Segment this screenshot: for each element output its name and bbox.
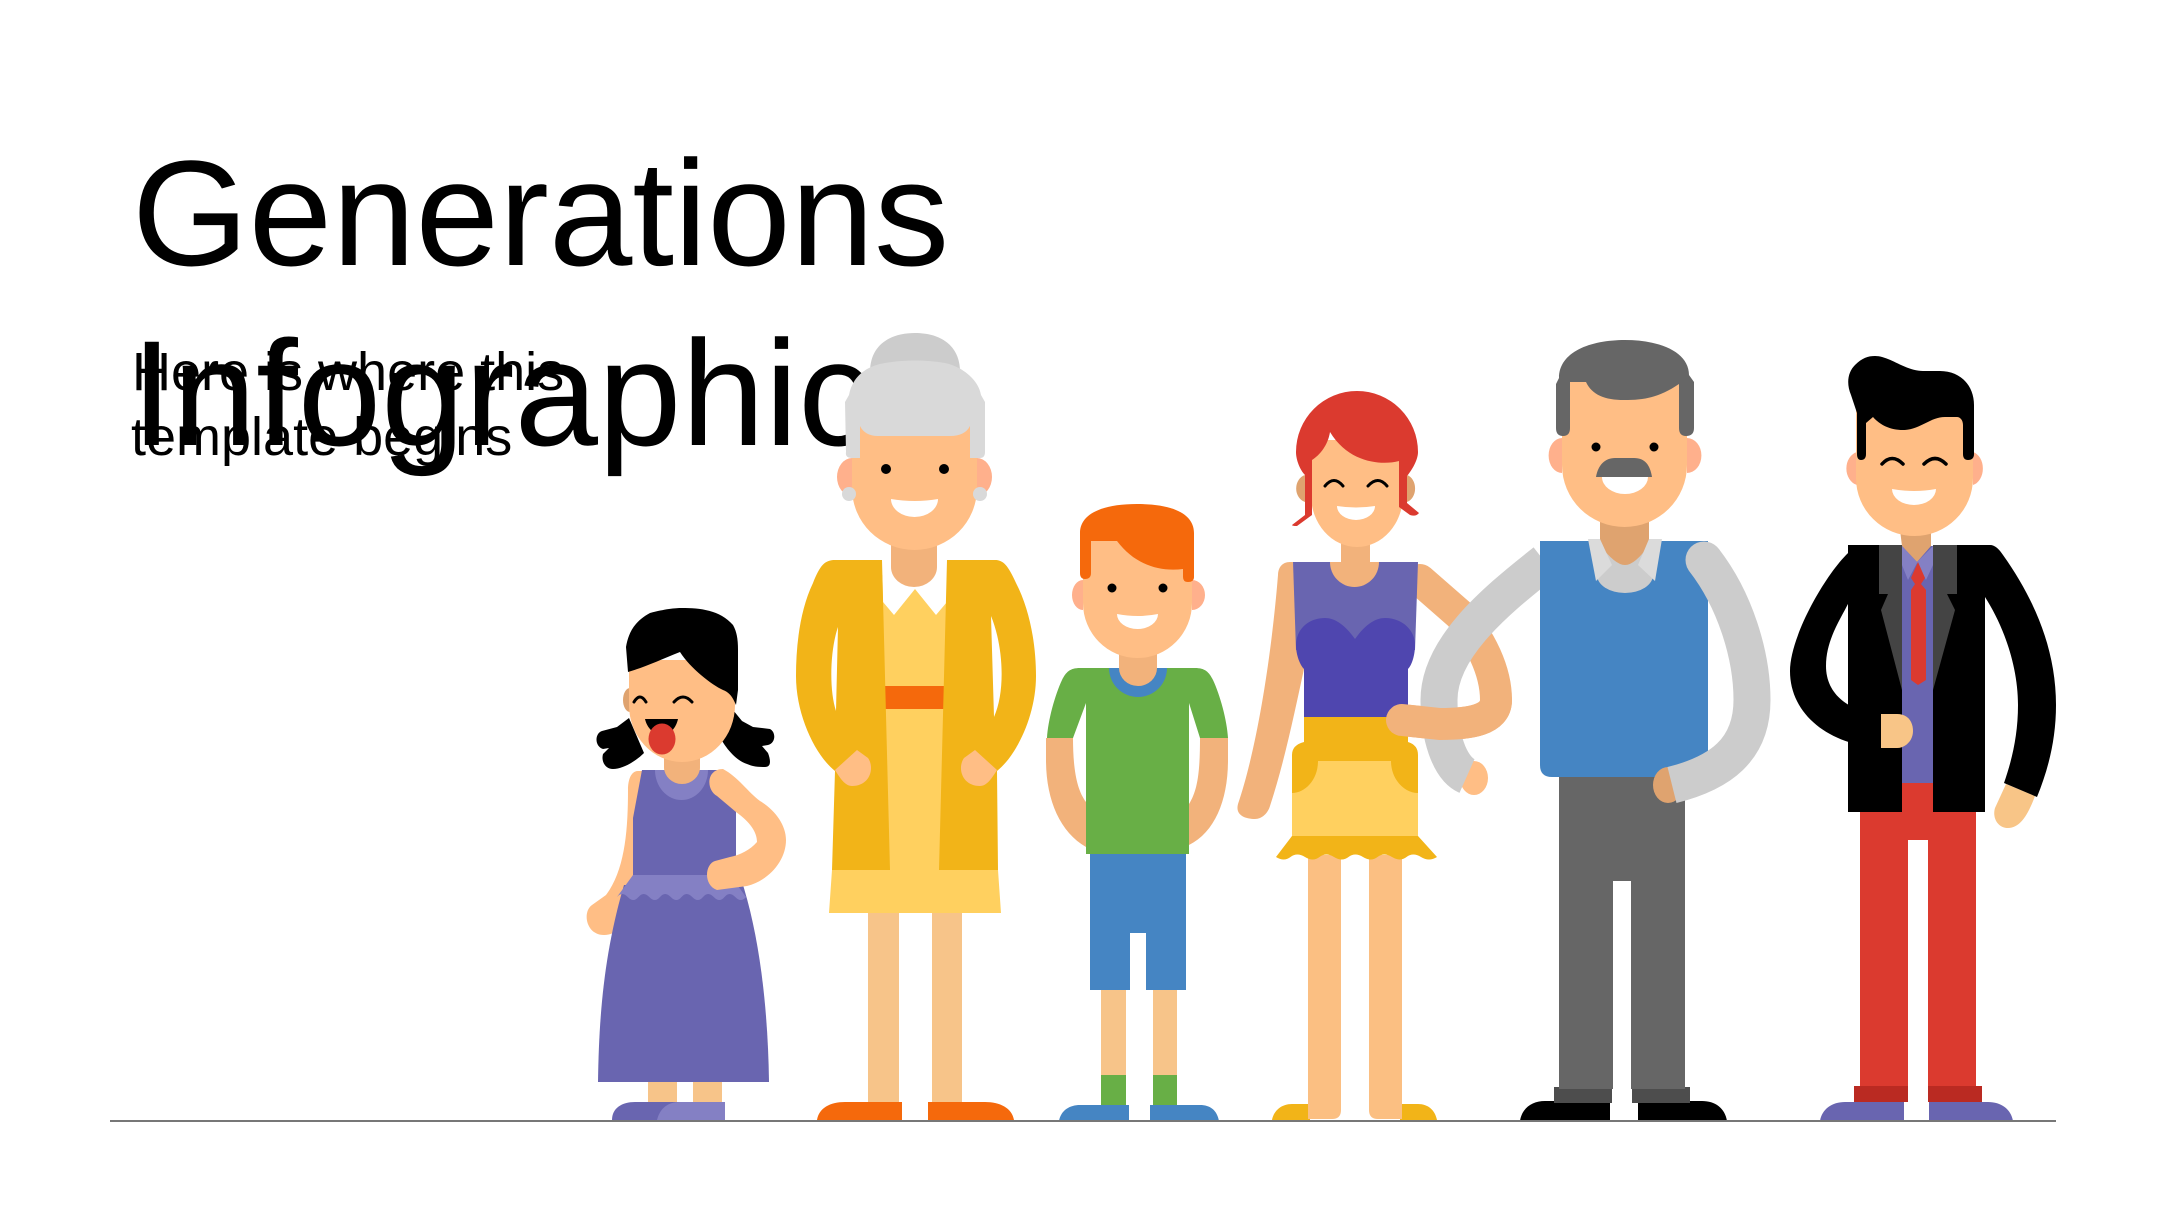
girl eyes [634, 697, 692, 702]
grandfather face [1562, 380, 1687, 527]
girl shoes [612, 1102, 680, 1120]
boy sleeves [1047, 668, 1228, 738]
boy legs [1101, 985, 1177, 1075]
grandfather vest [1540, 541, 1708, 777]
grandfather right hand [1653, 767, 1683, 803]
mother frill [1276, 836, 1437, 860]
grandmother belt [885, 686, 944, 709]
title [131, 129, 949, 477]
subtitle text: Here is where this [132, 342, 564, 402]
grandmother sleeve gaps [831, 616, 1002, 717]
boy shirt [1086, 668, 1189, 854]
father left hand [1881, 714, 1913, 748]
boy socks [1101, 1075, 1177, 1106]
mother face [1311, 440, 1403, 547]
boy arms [1046, 738, 1228, 847]
grandfather left sleeve [1439, 562, 1545, 776]
mother hair [1292, 391, 1419, 526]
grandmother ears [837, 458, 992, 496]
girl hair [626, 608, 738, 705]
father mouth [1892, 489, 1936, 505]
grandfather ears [1549, 438, 1701, 473]
girl right arm [707, 769, 786, 890]
grandfather shoes [1520, 1101, 1727, 1121]
mother left arm [1237, 562, 1304, 819]
father jacket panels [1848, 545, 1985, 812]
grandmother neck [891, 545, 937, 587]
boy ears [1072, 580, 1205, 610]
boy shoes [1059, 1105, 1219, 1121]
figure: boy [1046, 504, 1228, 1121]
father right hand [1994, 784, 2035, 828]
subtitle text: template begins [131, 407, 512, 467]
girl mouth [645, 719, 678, 735]
subtitle text [131, 342, 564, 467]
grandmother dress [829, 575, 1001, 913]
grandmother collar [882, 560, 947, 615]
grandmother hands [835, 750, 997, 786]
grandfather left hand [1460, 761, 1488, 795]
grandfather neck [1600, 520, 1649, 565]
mother ears [1296, 475, 1415, 502]
figure: father [1790, 356, 2056, 1121]
grandfather hair [1556, 340, 1694, 436]
father tie [1911, 562, 1926, 685]
figure: girl [587, 608, 786, 1120]
father trouser cuffs [1854, 1086, 1982, 1102]
girl front shoe [657, 1102, 725, 1120]
grandfather eyes [1592, 442, 1658, 452]
mother mouth [1337, 506, 1375, 520]
girl legs [648, 1075, 722, 1104]
mother pockets [1292, 742, 1418, 793]
boy hair [1080, 504, 1194, 582]
figure: mother [1237, 391, 1496, 1120]
grandfather cuffs [1554, 1087, 1690, 1103]
father shirt [1902, 546, 1933, 783]
grandfather moustache [1596, 458, 1652, 477]
mother neck [1341, 540, 1370, 562]
grandmother eyes [881, 464, 949, 474]
mother skirt band [1304, 717, 1408, 761]
grandmother mouth [891, 499, 938, 517]
grandfather undershirt collar [1597, 541, 1653, 593]
figure: grandfather [1402, 340, 1752, 1121]
boy eyes [1108, 584, 1168, 592]
mother skirt [1292, 761, 1418, 836]
grandmother earring right [973, 487, 987, 501]
grandmother shoes [817, 1102, 1014, 1120]
grandfather right sleeve [1672, 542, 1752, 785]
father left arm [1790, 545, 1881, 748]
grandmother legs [868, 905, 962, 1104]
father eyes [1882, 458, 1946, 464]
grandmother cardigan right [939, 560, 1036, 870]
mother forearm over sleeve [1402, 700, 1496, 724]
figure: grandmother [796, 333, 1036, 1120]
mother far arm [1402, 580, 1496, 724]
grandmother earrings [842, 487, 856, 501]
grandmother hair [845, 360, 985, 458]
girl ear [623, 688, 637, 712]
boy collar [1109, 668, 1167, 697]
girl collar [655, 770, 708, 800]
mother shoes [1272, 1104, 1437, 1120]
father shirt collar [1902, 546, 1933, 580]
mother bust [1296, 618, 1415, 717]
title: Infographic [131, 309, 873, 477]
girl ponytails [596, 710, 774, 769]
boy neck [1119, 650, 1157, 686]
grandmother hair bun [870, 333, 960, 372]
girl dress top [633, 770, 736, 875]
father hair [1848, 356, 1974, 460]
grandfather mouth [1602, 477, 1648, 494]
boy shorts [1090, 850, 1186, 990]
girl skirt [598, 885, 769, 1082]
grandmother face [852, 425, 977, 550]
girl neck [664, 750, 700, 784]
grandfather trousers [1559, 770, 1685, 1089]
girl frill [617, 875, 746, 900]
boy face [1083, 540, 1192, 658]
father right arm [1975, 545, 2056, 797]
grandfather shirt collar [1588, 539, 1662, 581]
girl left arm [587, 771, 642, 935]
title: Generations [132, 129, 949, 297]
father neck [1900, 530, 1931, 562]
girl tongue [648, 724, 676, 754]
mother legs [1308, 855, 1402, 1119]
mother top [1293, 562, 1418, 650]
girl neck front [664, 758, 700, 784]
father shoes [1820, 1102, 2013, 1121]
father trousers [1860, 783, 1976, 1086]
father lapels [1879, 545, 1957, 690]
boy mouth [1117, 614, 1158, 629]
grandmother cardigan left [796, 560, 890, 870]
girl face [629, 660, 735, 762]
father face [1856, 410, 1973, 536]
father ears [1846, 452, 1983, 485]
mother neckline [1330, 562, 1379, 587]
mother eyes [1325, 480, 1387, 486]
ground line [110, 1120, 2056, 1122]
